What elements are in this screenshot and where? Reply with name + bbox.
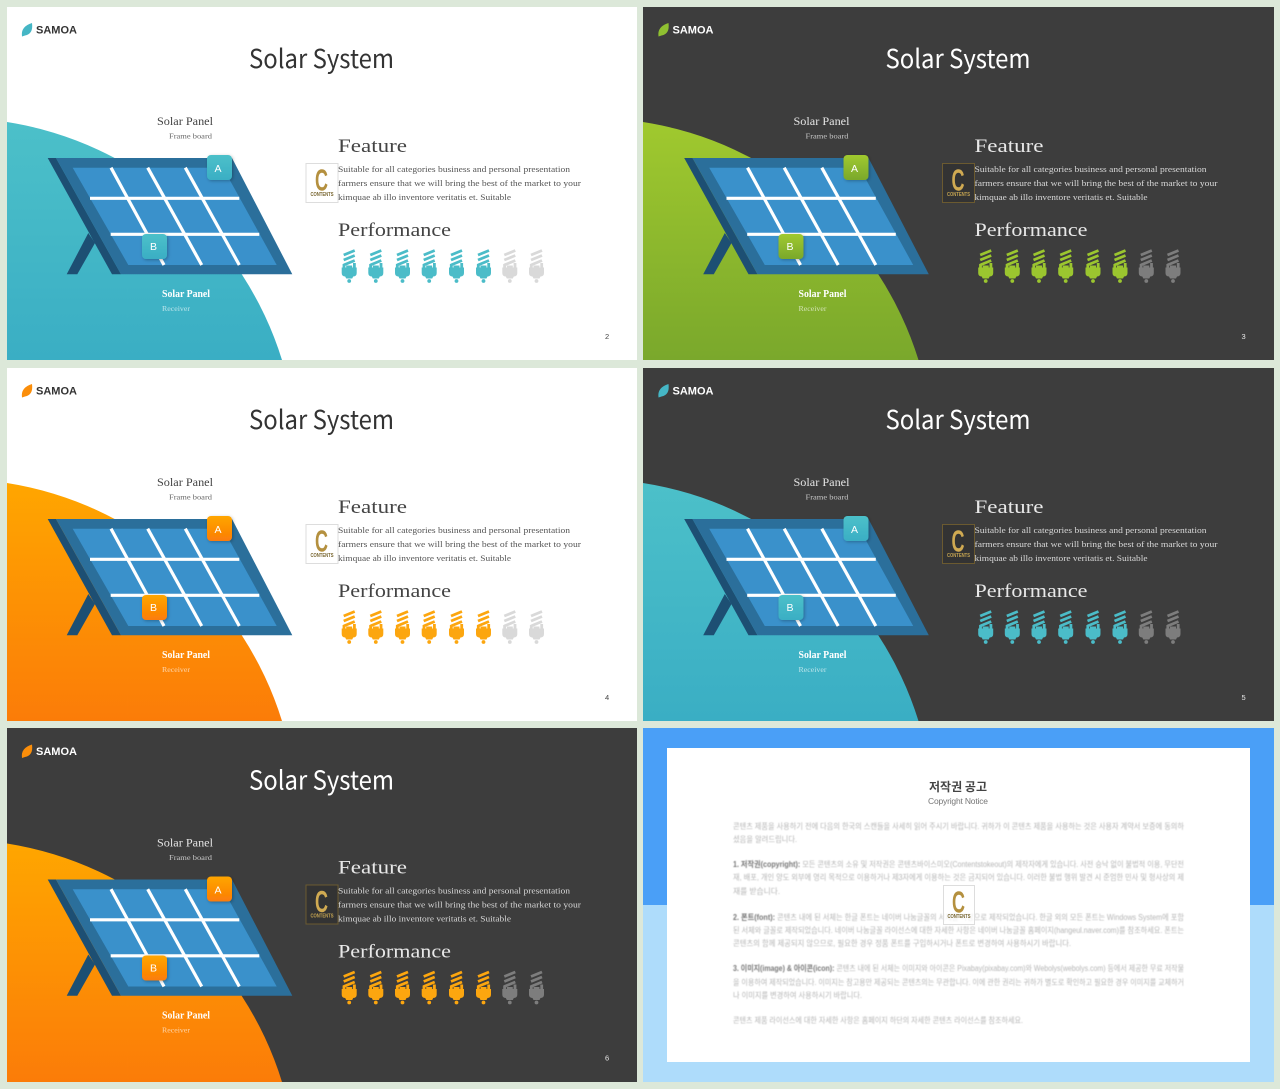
notice body text: 을 이용하여 제작되었습니다. 이미지는 참고용만 제공되는 콘텐츠의는 무관합니다. 이에 관한 권리는 귀하가 별도로 확인하고 필요한 경우 이미지를 교체하거 <box>733 977 1184 987</box>
logo <box>658 23 714 36</box>
receiver label: Solar Panel <box>162 1010 210 1022</box>
logo: SAMOA <box>672 386 714 398</box>
notice body text: 재를 받습니다. <box>733 886 780 896</box>
contents logo <box>944 884 974 924</box>
solar panel illustration <box>684 519 929 635</box>
bulbs rating <box>342 250 544 283</box>
slide 2: white teal <box>7 7 637 360</box>
title: Solar System <box>249 39 394 76</box>
badge B: B <box>786 241 794 253</box>
bulbs rating <box>342 612 544 644</box>
contents logo <box>306 884 338 924</box>
bulbs rating <box>978 250 1180 283</box>
contents logo: CONTENTS <box>310 914 334 920</box>
blue upper background <box>643 728 1274 905</box>
logo: SAMOA <box>36 746 77 758</box>
feature text: farmers ensure that we will bring the best of the market to your <box>338 539 581 549</box>
feature text <box>974 525 1218 563</box>
solar panel label <box>794 477 850 502</box>
badge A <box>844 516 868 541</box>
contents logo: CONTENTS <box>947 553 971 559</box>
feature heading: Feature <box>974 136 1044 157</box>
receiver label: Receiver <box>162 665 191 674</box>
green quarter circle <box>643 122 918 360</box>
badge A: A <box>214 163 222 175</box>
solar panel label: Frame board <box>806 132 849 140</box>
badge B <box>142 595 167 620</box>
slide background <box>7 728 637 1082</box>
page number: 3 <box>1242 332 1246 341</box>
feature text: kimquae ab illo inventore veritatis et. Suitable <box>338 192 511 202</box>
notice body text: 2. 폰트(font): 콘텐츠 내에 된 서체는 한글 폰트는 네이버 나눔글꼴의 서체를 바탕으로 제작되었습니다. 한글 외의 모든 폰트는 Windows System에 포함 <box>733 912 1185 922</box>
solar panel illustration <box>684 158 929 274</box>
notice body text <box>733 821 1185 1025</box>
badge B: B <box>150 962 157 974</box>
bulbs rating <box>342 972 544 1004</box>
badge A: A <box>214 524 222 536</box>
contents logo: C <box>952 162 964 198</box>
performance heading: Performance <box>974 581 1088 602</box>
receiver label: Solar Panel <box>162 289 210 300</box>
solar panel illustration <box>48 158 292 274</box>
solar panel illustration <box>48 519 292 635</box>
notice body text: 콘텐츠 제품 라이선스에 대한 자세한 사항은 홈페이지 하단의 자세한 콘텐츠 라이선스를 참조하세요. <box>733 1015 1023 1025</box>
teal quarter circle <box>7 122 282 360</box>
contents logo: CONTENTS <box>948 914 971 920</box>
solar panel label: Solar Panel <box>157 838 213 850</box>
page number: 5 <box>1242 693 1246 702</box>
receiver label <box>798 650 847 674</box>
title: Solar System <box>249 400 394 437</box>
solar panel label <box>157 838 213 862</box>
receiver label: Receiver <box>162 304 191 313</box>
badge B <box>778 595 804 620</box>
solar panel label <box>157 116 213 140</box>
feature text <box>338 164 581 202</box>
logo <box>658 384 714 398</box>
slide background <box>643 368 1274 721</box>
receiver label: Solar Panel <box>798 289 847 300</box>
page number: 4 <box>605 693 609 702</box>
title: Solar System <box>249 760 394 798</box>
solar panel label <box>157 477 213 502</box>
page number: 2 <box>605 332 609 341</box>
logo: SAMOA <box>36 24 77 36</box>
feature text <box>974 164 1218 202</box>
performance heading: Performance <box>338 942 451 962</box>
solar panel label <box>794 116 850 140</box>
notice body text: 콘텐츠의 함께 제공되지 않으므로, 필요한 경우 정품 폰트를 구입하시거나 폰트로 변경하여 사용하시기 바랍니다. <box>733 938 1071 948</box>
bulbs rating <box>978 612 1180 644</box>
receiver label: Receiver <box>798 665 827 674</box>
page number: 6 <box>605 1054 609 1062</box>
badge A <box>207 876 232 902</box>
feature text: farmers ensure that we will bring the best of the market to your <box>338 900 581 910</box>
feature text <box>338 525 581 563</box>
logo <box>22 744 77 758</box>
light blue lower background <box>643 905 1274 1082</box>
solar panel label: Solar Panel <box>794 477 850 489</box>
feature text: farmers ensure that we will bring the best of the market to your <box>338 178 581 188</box>
badge B <box>142 956 167 980</box>
contents logo: C <box>315 884 328 919</box>
badge A: A <box>851 163 858 175</box>
notice body text: 1. 저작권(copyright): 모든 콘텐츠의 소유 및 저작권은 콘텐츠바이스미오(Contentstokeout)의 제작자에게 있습니다. 사전 승낙 없이 불법적 이용, 무단전 <box>733 859 1184 869</box>
feature text: kimquae ab illo inventore veritatis et. Suitable <box>974 192 1148 202</box>
orange quarter circle <box>7 483 282 721</box>
badge A <box>207 155 232 180</box>
slide background <box>7 7 637 360</box>
notice body text: 3. 이미지(image) & 아이콘(icon): 콘텐츠 내에 된 서체는 이미지와 아이콘은 Pixabay(pixabay.com)와 Webolys(webolys.com) 등에서 제공한 무료 저작물 <box>733 963 1184 973</box>
feature text: Suitable for all categories business and personal presentation <box>974 525 1207 535</box>
badge A <box>844 155 868 180</box>
feature text: Suitable for all categories business and personal presentation <box>338 525 571 535</box>
title: Solar System <box>886 39 1030 76</box>
feature text: farmers ensure that we will bring the best of the market to your <box>974 178 1218 188</box>
notice subheading: Copyright Notice <box>928 796 988 806</box>
copyright notice slide <box>643 728 1274 1082</box>
solar panel label: Frame board <box>806 492 849 502</box>
contents logo <box>306 524 338 564</box>
receiver label <box>798 289 847 313</box>
contents logo <box>306 162 338 202</box>
performance heading: Performance <box>338 220 451 241</box>
orange quarter circle <box>7 844 282 1082</box>
solar panel label: Frame board <box>169 492 212 502</box>
slide background <box>7 368 637 721</box>
notice body text: 셨음을 알려드립니다. <box>733 834 797 844</box>
teal quarter circle <box>643 483 918 721</box>
notice heading: 저작권 공고 <box>929 778 987 795</box>
feature text: farmers ensure that we will bring the best of the market to your <box>974 539 1218 549</box>
badge B: B <box>150 602 157 614</box>
receiver label <box>162 1010 210 1034</box>
feature heading: Feature <box>974 497 1044 518</box>
badge B <box>778 234 804 259</box>
feature heading: Feature <box>338 858 407 878</box>
feature text: kimquae ab illo inventore veritatis et. Suitable <box>974 553 1148 563</box>
contents logo: C <box>952 884 965 920</box>
logo: SAMOA <box>672 24 714 36</box>
logo <box>22 384 77 398</box>
solar panel label: Frame board <box>169 132 212 140</box>
contents logo: C <box>952 524 964 558</box>
receiver label: Solar Panel <box>798 650 847 661</box>
feature text <box>338 886 581 924</box>
contents logo: C <box>315 162 328 198</box>
performance heading: Performance <box>974 220 1088 241</box>
receiver label: Receiver <box>162 1026 191 1034</box>
notice body text: 재, 배포, 개인 양도 외부에 영리 목적으로 이용하거나 제3자에게 이용하는 것은 금지되어 있습니다. 이러한 불법 행위 발견 시 준엄한 민사 및 형사상의 제 <box>733 872 1184 882</box>
white notice card <box>667 748 1250 1062</box>
receiver label: Solar Panel <box>162 650 210 661</box>
slide 4: white orange <box>7 368 637 721</box>
badge A: A <box>214 884 222 896</box>
title: Solar System <box>886 400 1030 437</box>
feature text: kimquae ab illo inventore veritatis et. Suitable <box>338 553 511 563</box>
feature heading: Feature <box>338 136 407 157</box>
badge B: B <box>150 241 157 253</box>
solar panel label: Solar Panel <box>794 116 850 128</box>
notice body text: 된 서체와 글꼴로 제작되었습니다. 네이버 나눔글꼴 라이선스에 대한 자세한 사항은 네이버 나눔글꼴 홈페이지(hangeul.naver.com)를 참조하세요. 폰트는 <box>733 925 1184 935</box>
solar panel label: Frame board <box>169 853 212 862</box>
receiver label <box>162 650 210 674</box>
contents logo: CONTENTS <box>310 553 334 559</box>
slide 6: dark orange <box>7 728 637 1082</box>
badge A <box>207 516 232 541</box>
performance heading: Performance <box>338 581 451 602</box>
slide 5: dark teal <box>643 368 1274 721</box>
feature text: Suitable for all categories business and personal presentation <box>338 164 571 174</box>
logo: SAMOA <box>36 386 77 398</box>
slide 3: dark green <box>643 7 1274 360</box>
contents logo: CONTENTS <box>310 192 334 198</box>
receiver label: Receiver <box>798 304 827 313</box>
badge A: A <box>851 524 858 536</box>
feature text: Suitable for all categories business and personal presentation <box>338 886 571 896</box>
contents logo: CONTENTS <box>947 192 971 198</box>
contents logo <box>942 162 974 202</box>
slide background <box>643 7 1274 360</box>
notice body text: 나 이미지를 변경하여 사용하시기 바랍니다. <box>733 990 862 1000</box>
solar panel label: Solar Panel <box>157 477 213 489</box>
badge B: B <box>786 602 794 614</box>
contents logo: C <box>315 524 328 558</box>
feature text: kimquae ab illo inventore veritatis et. Suitable <box>338 914 511 924</box>
solar panel label: Solar Panel <box>157 116 213 128</box>
feature heading: Feature <box>338 497 407 518</box>
receiver label <box>162 289 210 313</box>
feature text: Suitable for all categories business and personal presentation <box>974 164 1207 174</box>
solar panel illustration <box>48 880 292 996</box>
badge B <box>142 234 167 259</box>
contents logo <box>942 524 974 564</box>
logo <box>22 23 77 36</box>
notice body text: 콘텐츠 제품을 사용하기 전에 다음의 한국의 스캔들을 사세히 읽어 주시기 바랍니다. 귀하가 이 콘텐츠 제품을 사용하는 것은 사용자 계약서 보증에 동의하 <box>733 821 1185 831</box>
